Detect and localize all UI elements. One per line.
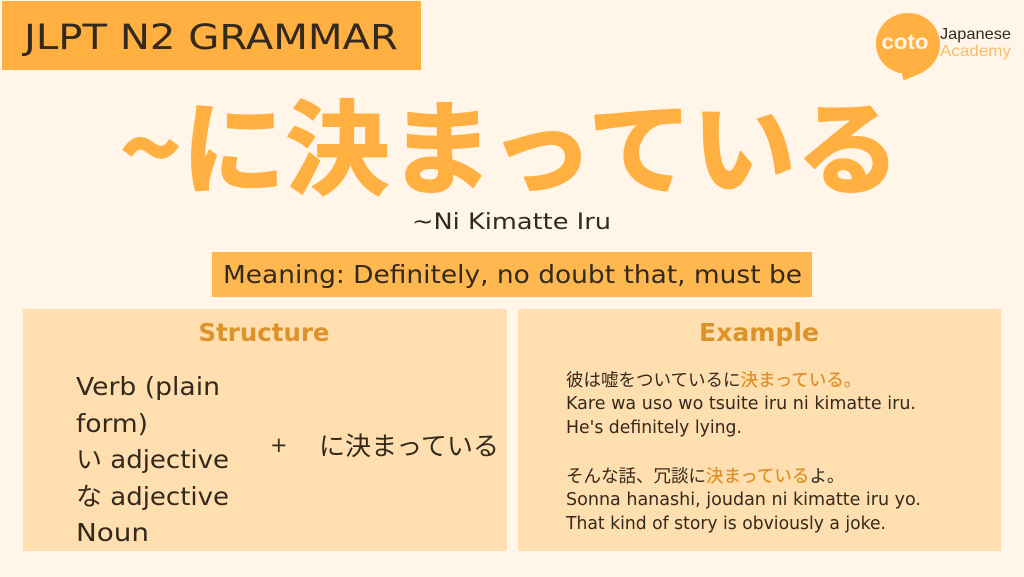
logo: Coto Japanese Academy: coto bbox=[882, 31, 928, 54]
example sentence 2 bbox=[565, 463, 921, 534]
romaji subtitle: ~Ni Kimatte Iru bbox=[412, 209, 611, 235]
meaning banner bbox=[212, 252, 812, 297]
logo: Coto Japanese Academy: Academy bbox=[940, 43, 1011, 60]
structure word list: Verb (plain bbox=[76, 372, 220, 401]
panel: structure bbox=[23, 309, 507, 551]
example heading: Example bbox=[699, 318, 819, 347]
structure word list bbox=[76, 372, 229, 547]
example sentence 1 bbox=[566, 367, 916, 438]
example sentence 1: He's definitely lying. bbox=[566, 418, 742, 438]
structure word list: form) bbox=[76, 409, 148, 438]
example sentence 2: そんな話、冗談に決まっているよ。 bbox=[566, 463, 844, 488]
plus sign: + bbox=[270, 433, 288, 457]
header badge: JLPT N2 Grammar bbox=[2, 1, 421, 70]
structure heading: Structure bbox=[198, 318, 330, 347]
meaning banner: Meaning: Definitely, no doubt that, must be bbox=[223, 260, 802, 289]
example sentence 2: That kind of story is obviously a joke. bbox=[565, 514, 886, 534]
panel: example bbox=[518, 309, 1001, 551]
structure word list: な adjective bbox=[76, 482, 229, 511]
logo: Coto Japanese Academy: Japanese bbox=[940, 26, 1011, 43]
logo: Coto Japanese Academy bbox=[876, 13, 1011, 80]
main title: ~に決まっている bbox=[120, 69, 900, 216]
header badge: JLPT N2 Grammar: JLPT N2 GRAMMAR bbox=[22, 18, 398, 58]
example sentence 2: Sonna hanashi, joudan ni kimatte iru yo. bbox=[566, 490, 921, 510]
structure word list: い adjective bbox=[76, 445, 229, 474]
example sentence 1: 彼は嘘をついているに決まっている。 bbox=[566, 367, 861, 392]
grammar pattern: に決まっている bbox=[319, 426, 499, 463]
example sentence 1: Kare wa uso wo tsuite iru ni kimatte iru. bbox=[566, 394, 916, 414]
structure word list: Noun bbox=[76, 518, 149, 547]
